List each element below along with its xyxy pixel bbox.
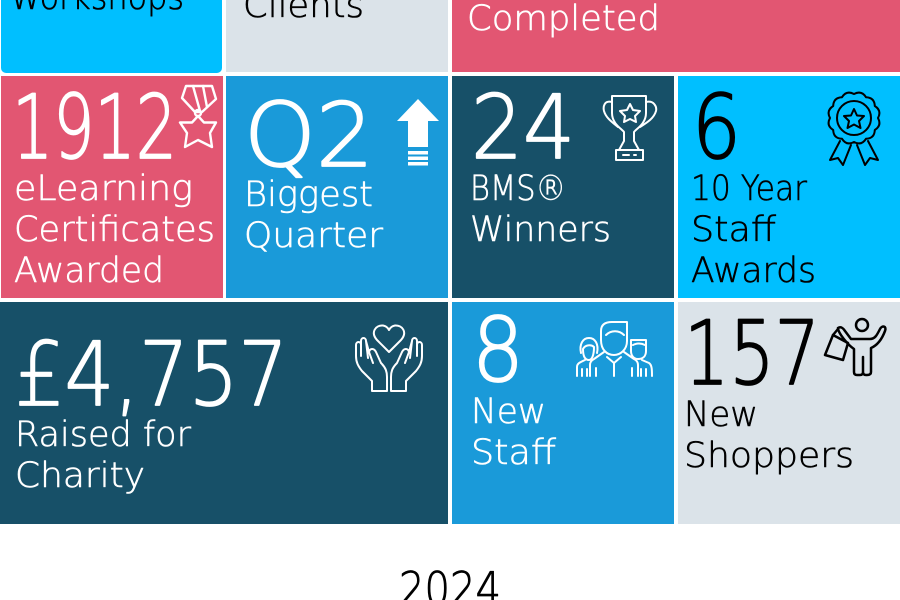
right hand — [391, 338, 422, 391]
panel: biggest quarter: Biggest — [244, 175, 373, 215]
panel: new shoppers: New — [684, 395, 758, 435]
panel: bms winners — [452, 76, 674, 298]
panel: staff awards: Staff — [691, 210, 776, 250]
panel: workshops — [1, 0, 222, 73]
icon: hands holding heart — [356, 325, 422, 391]
icon: up arrow — [397, 99, 439, 166]
panel: staff awards — [678, 76, 900, 298]
panel: elearning certificates: eLearning — [14, 169, 193, 209]
panel: new staff: New — [471, 392, 546, 432]
panel: staff awards: Awards — [691, 251, 816, 291]
panel: bms winners: 24 — [471, 76, 575, 179]
panel: completed — [452, 0, 900, 72]
panel: elearning certificates — [1, 76, 223, 298]
panel: new staff: 8 — [472, 299, 524, 402]
panel: elearning certificates: Awarded — [14, 251, 164, 291]
panel: biggest quarter: Quarter — [244, 216, 384, 256]
panel: new staff: Staff — [471, 433, 556, 473]
panel: new shoppers: 157 — [684, 302, 820, 405]
panel: bms winners: BMS® — [470, 169, 566, 209]
panel: bms winners: Winners — [470, 210, 611, 250]
panel: clients — [226, 0, 448, 72]
panel: completed: Completed — [467, 0, 660, 39]
panel: raised for charity: Charity — [15, 456, 145, 496]
panel: staff awards: 10 Year — [691, 169, 808, 209]
left hand — [356, 338, 387, 391]
panel: raised for charity: Raised for — [15, 415, 192, 455]
panel: new staff — [452, 299, 674, 524]
icon: medal — [180, 86, 216, 147]
panel: new shoppers — [678, 302, 900, 524]
panel: biggest quarter: Q2 — [244, 84, 374, 187]
icon: shopper with bag — [825, 319, 885, 375]
panel: elearning certificates: Certificates — [14, 210, 215, 250]
icon: rosette — [829, 93, 879, 165]
icon: team — [577, 322, 652, 376]
panel: new shoppers: Shoppers — [684, 436, 854, 476]
panel: elearning certificates: 1912 — [12, 76, 177, 179]
panel: raised for charity — [0, 302, 448, 524]
panel: biggest quarter — [226, 76, 448, 298]
panel: staff awards: 6 — [692, 76, 741, 179]
panel: raised for charity: £4,757 — [15, 323, 288, 426]
icon: trophy — [604, 96, 656, 160]
